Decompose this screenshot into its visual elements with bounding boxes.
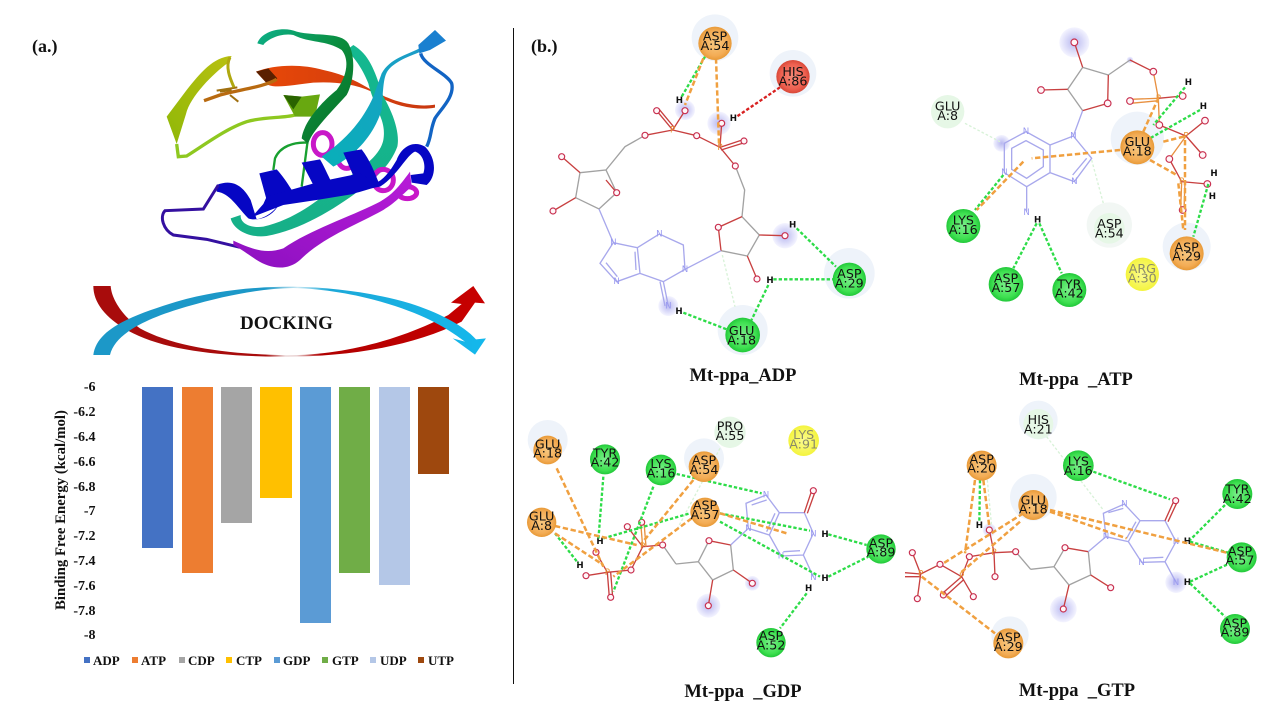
y axis tick labels: -7 xyxy=(84,504,96,519)
residue PRO A:55 xyxy=(714,417,746,448)
residue LYS A:16: A:16 xyxy=(949,222,978,237)
molecule: GTP skeleton: H xyxy=(1184,537,1191,547)
halos and atom glows xyxy=(528,420,760,618)
molecule: GTP skeleton: H xyxy=(976,521,983,531)
residue ASP A:29 xyxy=(1170,236,1204,270)
residue LYS A:16: LYS xyxy=(953,213,974,228)
axis title: Binding Free Energy (kcal/mol) xyxy=(53,410,69,610)
residue LYS A:16 xyxy=(646,455,676,485)
residue ASP A:57 xyxy=(989,267,1023,302)
molecule: GDP skeleton: N xyxy=(810,573,817,583)
interaction bonds xyxy=(555,448,868,628)
protein ribbon structure xyxy=(162,29,452,268)
residue ARG A:30: ARG xyxy=(1129,261,1156,276)
molecule: GTP skeleton xyxy=(905,498,1191,612)
residue ASP A:54 xyxy=(1094,213,1125,244)
ribbon: magenta coil xyxy=(313,133,417,199)
residue ASP A:20 xyxy=(967,451,997,481)
residue ASP A:57: A:57 xyxy=(992,280,1020,295)
molecule: GDP skeleton: H xyxy=(596,537,604,547)
residue ASP A:89 xyxy=(866,534,896,564)
molecule: GDP skeleton: N xyxy=(778,551,784,561)
molecule: ADP skeleton: N xyxy=(613,277,620,287)
molecule: GTP skeleton: P xyxy=(959,572,964,582)
residue GLU A:18 xyxy=(1120,130,1154,164)
molecule: ATP skeleton: H xyxy=(1034,215,1041,225)
molecule: GTP skeleton: N xyxy=(1121,499,1128,509)
molecule: GTP skeleton: N xyxy=(1173,578,1179,588)
caption ADP: Mt-ppa_ADP xyxy=(690,366,796,386)
residue GLU A:18 xyxy=(1018,490,1048,520)
residue ASP A:20: ASP xyxy=(970,451,994,466)
ribbon: dark purple coil xyxy=(162,185,240,247)
molecule: GTP skeleton: P xyxy=(918,569,923,579)
molecule: ATP skeleton: N xyxy=(1001,168,1008,178)
residue ASP A:57: ASP xyxy=(693,498,718,513)
molecule: GDP skeleton: P xyxy=(640,542,645,552)
residue ASP A:29: A:29 xyxy=(1172,249,1201,264)
residue ASP A:54 xyxy=(689,451,719,482)
molecule: GTP skeleton: P xyxy=(991,548,997,558)
y axis tick labels: -8 xyxy=(84,628,96,643)
molecule: ATP skeleton: H xyxy=(1209,192,1216,202)
residue PRO A:55: PRO xyxy=(717,419,743,434)
residue HIS A:86: HIS xyxy=(782,64,804,79)
residue ARG A:30: A:30 xyxy=(1128,270,1157,285)
molecule: ADP skeleton: H xyxy=(789,220,796,230)
y axis tick labels xyxy=(73,380,96,643)
panel label (b.): (b.) xyxy=(531,36,558,57)
ribbon: purple strand xyxy=(233,172,412,268)
residue GLU A:18 xyxy=(533,436,562,464)
residue TYR A:42: A:42 xyxy=(1055,286,1084,301)
residue ASP A:54: ASP xyxy=(1097,216,1122,231)
residue ASP A:89 xyxy=(1220,614,1250,644)
residue ASP A:29: ASP xyxy=(996,630,1021,645)
molecule: GDP skeleton: H xyxy=(576,561,584,571)
molecule: GDP skeleton: N xyxy=(763,490,769,500)
residue GLU A:18: A:18 xyxy=(1019,502,1048,517)
residue ASP A:54: ASP xyxy=(703,29,728,44)
residue ASP A:52: A:52 xyxy=(757,637,785,652)
ribbon: blue top-right strand xyxy=(418,30,452,147)
residue LYS A:16: A:16 xyxy=(1064,463,1093,478)
residue TYR A:42: TYR xyxy=(1056,276,1082,291)
molecule: GDP skeleton: H xyxy=(821,574,829,584)
ribbon: yellow-green loop xyxy=(167,56,320,157)
molecule: ADP skeleton: H xyxy=(766,276,774,286)
residue ASP A:54: A:54 xyxy=(690,462,718,477)
residue GLU A:18: A:18 xyxy=(1123,143,1152,158)
molecule: GDP skeleton: N xyxy=(745,524,752,534)
residue GLU A:8: GLU xyxy=(935,99,960,114)
residue ASP A:89: ASP xyxy=(1223,615,1248,630)
legend: GDP xyxy=(283,653,310,668)
residue HIS A:21: HIS xyxy=(1028,412,1049,427)
molecule: ADP skeleton: H xyxy=(730,114,737,124)
halos and atom glows xyxy=(993,27,1211,271)
ribbon: teal lower sheet xyxy=(231,45,398,236)
y axis tick labels: -6.8 xyxy=(73,480,96,495)
residue HIS A:86 xyxy=(776,60,810,93)
residue ASP A:57 xyxy=(1226,542,1257,572)
residue ASP A:54: ASP xyxy=(692,453,717,468)
molecule: ATP skeleton: N xyxy=(1023,208,1030,218)
molecule: ATP skeleton xyxy=(1001,39,1218,225)
residue LYS A:16: LYS xyxy=(1068,454,1089,469)
molecule: GDP skeleton: H xyxy=(821,530,829,540)
legend: UTP xyxy=(428,653,454,668)
residue ASP A:89: ASP xyxy=(869,535,894,550)
residue GLU A:8 xyxy=(931,95,964,128)
residue ASP A:29: A:29 xyxy=(994,639,1023,654)
y axis tick labels: -7.6 xyxy=(73,579,96,594)
residue LYS A:16 xyxy=(946,209,980,243)
residue HIS A:21 xyxy=(1023,409,1053,439)
residue GLU A:18: GLU xyxy=(1125,134,1150,149)
y axis tick labels: -6 xyxy=(84,380,96,395)
residue HIS A:21: A:21 xyxy=(1024,421,1053,436)
residue TYR A:42: A:42 xyxy=(591,455,619,470)
residue ASP A:52: ASP xyxy=(759,628,784,643)
legend: ATP xyxy=(141,653,166,668)
residue GLU A:18: GLU xyxy=(729,323,754,338)
interaction bonds xyxy=(922,437,1228,633)
molecule: ATP skeleton: H xyxy=(1200,102,1207,112)
docking label: DOCKING xyxy=(240,313,333,334)
y axis tick labels: -6.6 xyxy=(73,455,96,470)
residue LYS A:91 xyxy=(788,425,819,456)
residue ASP A:57 xyxy=(690,498,720,527)
panel: Mt-ppa ADP interaction map xyxy=(550,14,875,355)
residue TYR A:42: A:42 xyxy=(1223,491,1252,506)
docking arrows xyxy=(93,286,486,357)
molecule: GDP skeleton: N xyxy=(810,529,817,539)
residue HIS A:86: A:86 xyxy=(779,73,807,88)
molecule: ATP skeleton: N xyxy=(1023,127,1029,137)
residue LYS A:91: LYS xyxy=(793,427,814,442)
caption ATP: Mt-ppa _ATP xyxy=(1019,370,1133,390)
ribbon: green upper sheet xyxy=(257,29,353,144)
y axis tick labels: -7.4 xyxy=(73,554,96,569)
residue ASP A:20: A:20 xyxy=(967,461,996,476)
residue GLU A:18: GLU xyxy=(535,436,560,451)
molecule: ATP skeleton: P xyxy=(1179,177,1184,187)
caption GDP: Mt-ppa _GDP xyxy=(684,682,802,702)
arrow: blue curved xyxy=(93,287,486,355)
residue ASP A:54: A:54 xyxy=(1095,225,1124,240)
residue GLU A:18: A:18 xyxy=(727,332,756,347)
residue LYS A:16: A:16 xyxy=(647,465,675,480)
caption GTP: Mt-ppa _GTP xyxy=(1019,681,1135,701)
molecule: ATP skeleton: N xyxy=(1071,177,1078,187)
residue GLU A:8 xyxy=(527,508,556,537)
legend xyxy=(84,653,454,668)
y axis tick labels: -7.2 xyxy=(73,529,96,544)
legend: CTP xyxy=(236,653,262,668)
halos and atom glows xyxy=(658,14,875,355)
residue ASP A:29: A:29 xyxy=(835,275,864,290)
molecule: ADP skeleton: P xyxy=(670,125,675,135)
molecule: ADP skeleton: N xyxy=(656,229,663,239)
molecule: ADP skeleton: N xyxy=(682,265,688,275)
molecule: ATP skeleton: H xyxy=(1185,78,1192,88)
ribbon: cyan strand xyxy=(322,48,421,167)
residue GLU A:18: A:18 xyxy=(533,446,562,461)
molecule: ADP skeleton: H xyxy=(675,307,683,317)
residue PRO A:55: A:55 xyxy=(716,428,744,443)
ribbon: thin green loop xyxy=(273,143,308,187)
ribbon: orange-red strand xyxy=(204,66,435,109)
vertical divider xyxy=(513,28,514,684)
panel: Mt-ppa ATP interaction map xyxy=(931,27,1218,307)
residue ASP A:54: A:54 xyxy=(701,38,729,53)
residue GLU A:8: A:8 xyxy=(937,108,958,123)
ribbon: blue alpha helix xyxy=(217,144,434,219)
y axis tick labels: -7.8 xyxy=(73,604,96,619)
residue ASP A:89: A:89 xyxy=(1221,625,1249,640)
residue ASP A:29: ASP xyxy=(1174,239,1199,254)
panel: Mt-ppa GTP interaction map xyxy=(905,401,1257,658)
bars xyxy=(142,387,449,623)
molecule: ADP skeleton: H xyxy=(676,96,683,106)
residue ASP A:29 xyxy=(833,263,866,296)
panel label (a.): (a.) xyxy=(32,36,58,57)
residue LYS A:91: A:91 xyxy=(789,436,818,451)
residue TYR A:42 xyxy=(1052,273,1086,307)
residue TYR A:42 xyxy=(590,444,620,474)
molecule: GTP skeleton: N xyxy=(1173,537,1179,547)
residue ASP A:57: A:57 xyxy=(1226,553,1254,568)
residue GLU A:8: GLU xyxy=(529,509,554,524)
molecule: GDP skeleton: P xyxy=(605,568,610,578)
residue LYS A:16 xyxy=(1063,450,1094,481)
bar chart: binding free energy xyxy=(53,380,454,668)
legend: ADP xyxy=(93,653,120,668)
molecule: ATP skeleton: P xyxy=(1156,94,1161,104)
residue ASP A:57: ASP xyxy=(994,271,1019,286)
y axis tick labels: -6.4 xyxy=(73,430,96,445)
residue ASP A:57: ASP xyxy=(1228,543,1253,558)
residue TYR A:42 xyxy=(1222,479,1252,509)
legend: GTP xyxy=(332,653,359,668)
residue ARG A:30 xyxy=(1126,258,1159,291)
residue ASP A:89: A:89 xyxy=(867,545,895,560)
residue ASP A:29 xyxy=(993,628,1023,658)
residue TYR A:42: TYR xyxy=(592,445,617,460)
molecule: GTP skeleton: N xyxy=(1138,558,1145,568)
molecule: GDP skeleton: H xyxy=(805,584,812,594)
panel: Mt-ppa GDP interaction map xyxy=(527,417,896,657)
interaction bonds xyxy=(682,57,836,329)
residue GLU A:18 xyxy=(725,318,760,352)
legend: CDP xyxy=(188,653,215,668)
y axis tick labels: -6.2 xyxy=(73,405,96,420)
molecule: ATP skeleton: H xyxy=(1210,169,1218,179)
residue GLU A:18: GLU xyxy=(1021,492,1046,507)
residue TYR A:42: TYR xyxy=(1224,482,1250,497)
residue GLU A:8: A:8 xyxy=(531,518,552,533)
molecule: ATP skeleton: P xyxy=(1183,131,1189,141)
residue LYS A:16: LYS xyxy=(650,456,672,471)
molecule: ADP skeleton: P xyxy=(717,143,723,153)
molecule: GTP skeleton: N xyxy=(1103,532,1109,542)
molecule: ADP skeleton: N xyxy=(610,238,617,248)
molecule: ADP skeleton xyxy=(550,96,796,317)
molecule: ADP skeleton: N xyxy=(665,301,672,311)
residue ASP A:57: A:57 xyxy=(691,507,719,522)
residue ASP A:52 xyxy=(756,628,786,657)
residue ASP A:29: ASP xyxy=(837,266,862,281)
arrow: red curved xyxy=(93,286,485,357)
molecule: GTP skeleton: H xyxy=(1184,578,1191,588)
halos and atom glows xyxy=(983,401,1187,654)
interaction bonds xyxy=(965,87,1208,273)
molecule: ATP skeleton: N xyxy=(1070,131,1077,141)
molecule: GDP skeleton xyxy=(576,488,829,609)
legend: UDP xyxy=(380,653,407,668)
residue ASP A:54 xyxy=(698,27,732,60)
